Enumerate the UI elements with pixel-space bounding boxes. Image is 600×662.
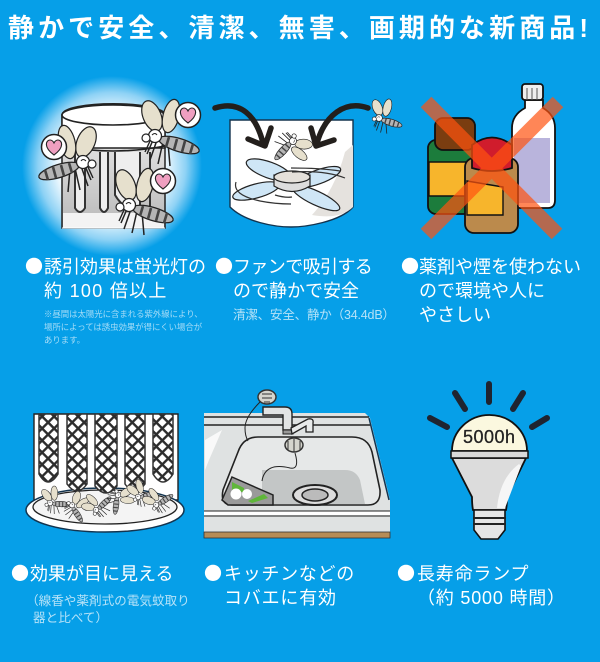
note: attraction caveat: あります。 xyxy=(44,335,85,345)
icon: light bulb xyxy=(430,384,547,539)
trapped mosquitoes xyxy=(39,473,178,527)
text: long-life lamp: 長寿命ランプ xyxy=(417,564,529,584)
text: fruit flies: キッチンなどの xyxy=(224,564,355,584)
text: fruit flies: コバエに有効 xyxy=(224,588,337,608)
text: no chemicals: やさしい xyxy=(419,305,491,325)
fly on faucet and trail xyxy=(245,390,276,441)
icon: lamp attracting mosquitoes xyxy=(22,76,202,256)
text: fan suction: ファンで吸引する xyxy=(233,257,372,277)
text: long-life lamp: （約 5000 時間） xyxy=(417,588,566,608)
note: clean safe quiet: 清潔、安全、静か（34.4dB） xyxy=(233,308,395,322)
text: fan suction: ので静かで安全 xyxy=(233,281,359,301)
text: no chemicals: ● xyxy=(401,253,419,279)
green bottle xyxy=(428,118,475,214)
mosquito with heart: upper right xyxy=(138,98,201,166)
text: no chemicals: 薬剤や煙を使わない xyxy=(419,257,581,277)
text: visible effect: ● xyxy=(11,560,29,586)
drain xyxy=(293,485,337,505)
bulb label: 5000h xyxy=(463,427,515,447)
note: attraction caveat: 場所によっては誘虫効果が得にくい場合が xyxy=(44,322,203,332)
fly below faucet and trail xyxy=(262,438,303,481)
white bottle xyxy=(512,84,555,208)
mosquito in cup xyxy=(267,125,316,173)
light rays xyxy=(430,384,547,427)
sink basin xyxy=(222,437,380,505)
arrow: right xyxy=(311,106,368,146)
text: long-life lamp: ● xyxy=(397,560,415,586)
tan bottle xyxy=(465,138,518,233)
mosquito with heart: lower right xyxy=(112,167,176,235)
icon: trap with mosquitoes on base xyxy=(26,414,184,532)
note: comparison: （線香や薬剤式の電気蚊取り xyxy=(26,593,190,608)
title: 静かで安全、清潔、無害、画期的な新商品! xyxy=(8,13,588,43)
bulb body xyxy=(452,458,526,510)
red cross xyxy=(426,102,558,234)
mosquito with heart: left xyxy=(37,124,100,192)
text: attraction effect: 誘引効果は蛍光灯の xyxy=(44,257,206,277)
strainer with scraps xyxy=(222,477,273,505)
faucet xyxy=(263,407,313,434)
text: attraction effect: ● xyxy=(25,253,43,279)
icon: flying mosquito xyxy=(370,98,403,134)
note: comparison: 器と比べて） xyxy=(33,611,108,625)
text: fan suction: ● xyxy=(215,253,233,279)
text: attraction effect: 約 100 倍以上 xyxy=(44,281,168,301)
fan blades xyxy=(231,154,345,215)
text: no chemicals: ので環境や人に xyxy=(419,281,545,301)
arrow: left xyxy=(215,106,271,146)
icon: kitchen sink xyxy=(204,390,390,538)
text: fruit flies: ● xyxy=(204,560,222,586)
icon: fan suction cup xyxy=(215,106,368,227)
note: attraction caveat: ※昼間は太陽光に含まれる紫外線により、 xyxy=(44,309,203,319)
screw base xyxy=(474,510,505,539)
text: visible effect: 効果が目に見える xyxy=(30,564,173,584)
icon: crossed-out chemical bottles xyxy=(426,84,558,234)
